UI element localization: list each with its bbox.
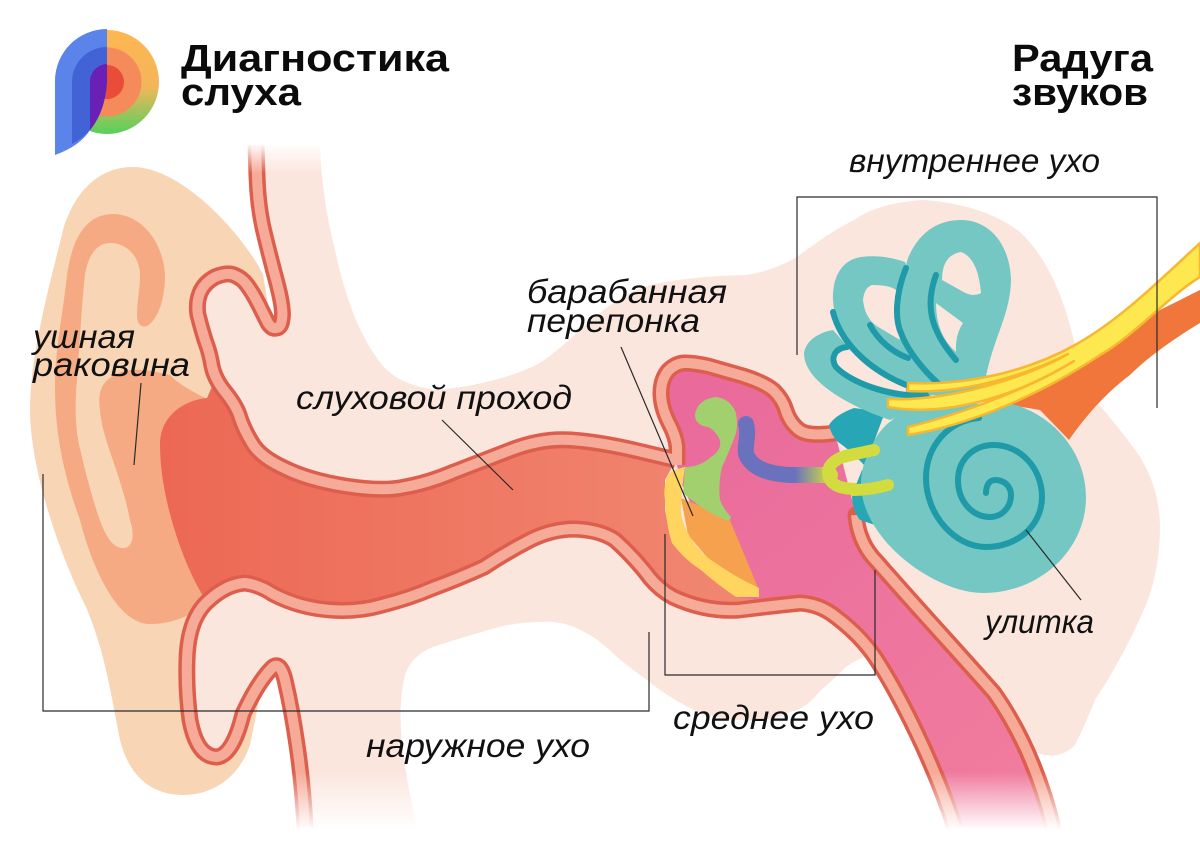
middle ear cavity (661, 363, 1053, 828)
label: outer ear: наружное ухо (366, 727, 590, 764)
ossicle: stapes and blue connection (746, 424, 888, 489)
ear canal (160, 380, 759, 610)
outer ear pinna (30, 167, 300, 795)
fade at top and bottom (235, 143, 1100, 852)
inner ear dark vestibule (829, 408, 885, 525)
label: middle ear: среднее ухо (673, 699, 874, 736)
label: eardrum with leader: барабанная (527, 273, 727, 310)
label: ear canal with leader (296, 379, 572, 490)
title: diagnostics of hearing (181, 38, 450, 114)
logo (55, 29, 159, 155)
canal and cavity walls (187, 145, 1053, 828)
bracket: inner ear (797, 197, 1157, 408)
label: pinna with leader (31, 318, 190, 465)
title: diagnostics of hearing: Диагностика (181, 38, 450, 80)
label: cochlea with leader (983, 530, 1094, 640)
brand name: Радуга (1012, 38, 1154, 80)
ossicle: malleus (683, 397, 737, 520)
semicircular canals (804, 220, 1011, 420)
bracket: middle ear (665, 534, 875, 675)
cochlea (861, 403, 1086, 593)
cochlea stapes arm overlay (845, 450, 888, 490)
label: eardrum with leader (527, 273, 727, 516)
bracket: outer ear (43, 474, 649, 711)
label: cochlea with leader: улитка (983, 603, 1094, 640)
brand name (1012, 38, 1154, 114)
eardrum (664, 467, 759, 598)
label: pinna with leader: ушная (31, 318, 135, 355)
label: pinna with leader: раковина (32, 346, 190, 383)
title: diagnostics of hearing: слуха (181, 72, 302, 114)
auditory nerve orange (985, 290, 1200, 440)
dark canal lines and spiral (833, 268, 1042, 547)
label: ear canal with leader: слуховой проход (296, 379, 572, 416)
label: eardrum with leader: перепонка (527, 302, 700, 339)
vestibular nerve yellow (888, 243, 1200, 435)
label: inner ear: внутреннее ухо (849, 142, 1100, 179)
surrounding tissue background (187, 145, 1160, 830)
brand name: звуков (1012, 72, 1148, 114)
